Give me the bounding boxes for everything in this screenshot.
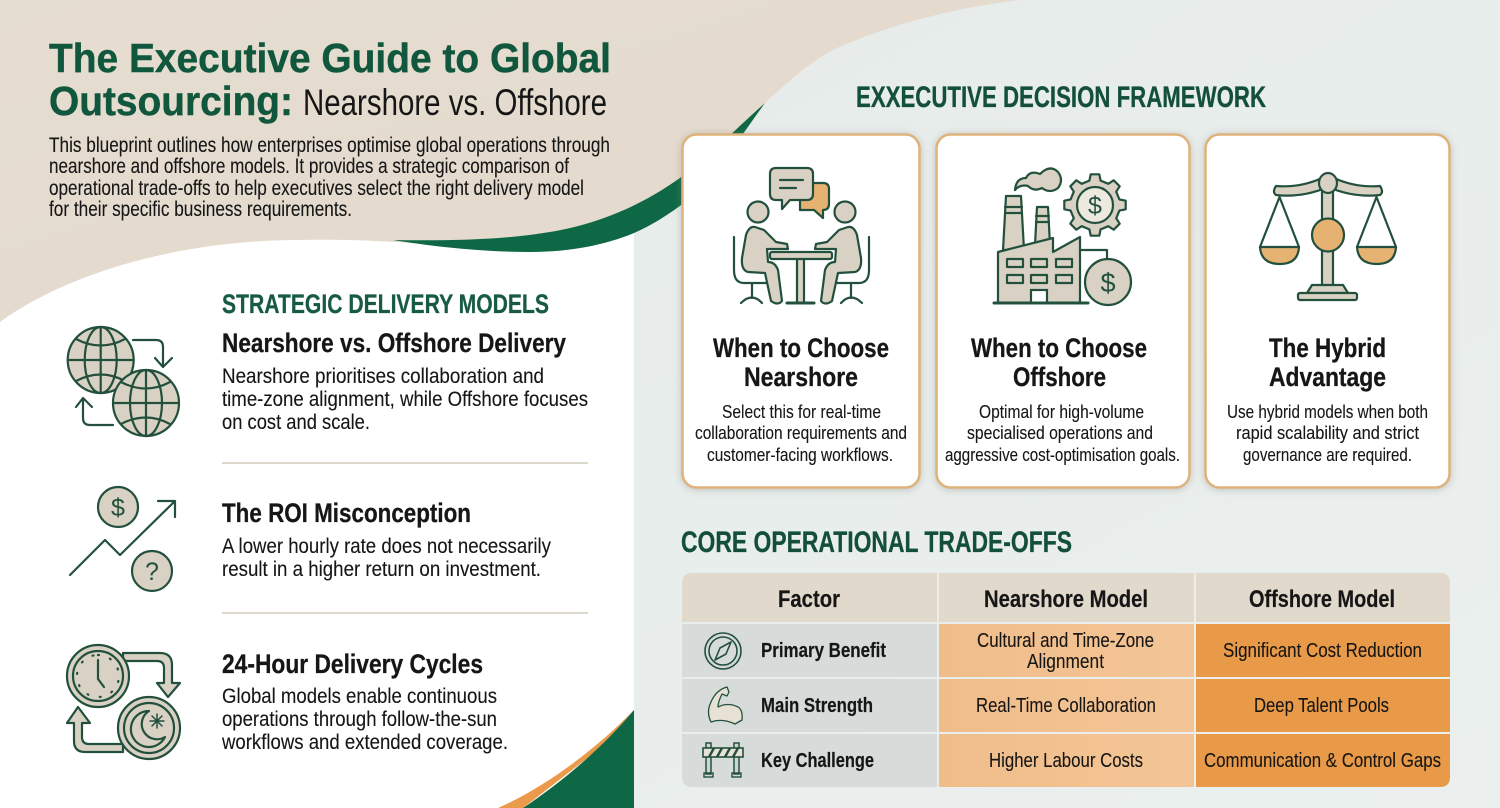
card text: Optimal for high-volume <box>979 401 1144 422</box>
title <box>49 35 611 124</box>
text: nearshore vs offshore delivery <box>222 328 588 434</box>
text: ROI misconception: The ROI Misconception <box>222 498 471 528</box>
card text: When to Choose <box>713 333 889 363</box>
card text: customer-facing workflows. <box>707 444 893 465</box>
icon: flexed arm <box>708 687 742 724</box>
card text <box>695 333 907 465</box>
icon: factory, gear and coins: $ <box>1100 268 1116 298</box>
text: ROI misconception: result in a higher return on investment. <box>222 558 541 581</box>
card text: specialised operations and <box>967 422 1153 443</box>
card text: Advantage <box>1269 362 1386 392</box>
card text: When to Choose <box>971 333 1147 363</box>
text: nearshore vs offshore delivery: time-zone alignment, while Offshore focuses <box>222 388 588 411</box>
icon: factory, gear and coins: $ <box>1088 192 1102 220</box>
intro text: for their specific business requirements. <box>49 198 352 221</box>
table header row: Offshore Model <box>1249 586 1395 613</box>
card text: Select this for real-time <box>722 401 881 422</box>
table header row: Nearshore Model <box>984 586 1148 613</box>
card text: governance are required. <box>1243 444 1412 465</box>
icon: two people at table talking <box>734 168 869 304</box>
card: when to choose offshore <box>936 134 1190 488</box>
icon: ROI chart with dollar and question <box>70 487 175 591</box>
card text <box>1227 333 1428 465</box>
table row: main strength <box>682 679 1450 732</box>
intro text: nearshore and offshore models. It provides a strategic comparison of <box>49 155 569 178</box>
table row: primary benefit <box>682 624 1450 677</box>
table header row: Factor <box>778 586 840 613</box>
table header row <box>682 573 1450 622</box>
table row: main strength: Deep Talent Pools <box>1254 695 1389 717</box>
table row: key challenge: Higher Labour Costs <box>989 750 1143 772</box>
card: when to choose nearshore <box>682 134 920 488</box>
background: white left panel <box>0 233 634 808</box>
intro text: operational trade-offs to help executives select the right delivery model <box>49 177 584 200</box>
text: 24-hour delivery cycles: operations through follow-the-sun <box>222 708 497 731</box>
text: 24-hour delivery cycles <box>221 649 508 754</box>
card text: aggressive cost-optimisation goals. <box>945 444 1180 465</box>
icon: compass <box>705 633 741 669</box>
table row: key challenge: Key Challenge <box>761 750 874 772</box>
table row: primary benefit: Primary Benefit <box>761 640 886 662</box>
icon: ROI chart with dollar and question: $ <box>111 494 125 522</box>
title: Outsourcing: <box>49 78 293 124</box>
background: beige header wave <box>0 0 1020 330</box>
card text: collaboration requirements and <box>695 422 907 443</box>
table row: primary benefit: Alignment <box>1027 651 1104 673</box>
table row: primary benefit: Significant Cost Reduction <box>1223 640 1422 662</box>
title: Nearshore vs. Offshore <box>303 82 607 123</box>
text: 24-hour delivery cycles: workflows and extended coverage. <box>221 731 508 754</box>
card: the hybrid advantage <box>1206 134 1450 488</box>
card text: Use hybrid models when both <box>1227 401 1428 422</box>
heading: executive decision framework: EXXECUTIVE DECISION FRAMEWORK <box>856 81 1266 114</box>
title: The Executive Guide to Global <box>49 35 611 81</box>
table row: primary benefit: Cultural and Time-Zone <box>977 630 1154 652</box>
icon: factory, gear and coins <box>994 168 1131 305</box>
text: nearshore vs offshore delivery: Nearshore prioritises collaboration and <box>222 365 544 388</box>
card text: Offshore <box>1013 362 1106 392</box>
table row: main strength: Main Strength <box>761 695 873 717</box>
card text: The Hybrid <box>1269 333 1386 363</box>
text: ROI misconception <box>222 498 551 581</box>
icon: 24-hour clock and moon cycle <box>67 645 180 759</box>
intro text <box>49 134 610 221</box>
text: 24-hour delivery cycles: Global models enable continuous <box>222 685 497 708</box>
text: ROI misconception: A lower hourly rate does not necessarily <box>222 535 551 558</box>
text: nearshore vs offshore delivery: Nearshore vs. Offshore Delivery <box>222 328 566 358</box>
table row: main strength: Real-Time Collaboration <box>976 695 1156 717</box>
icon: road barrier <box>703 743 743 777</box>
card text <box>945 333 1180 465</box>
heading: core operational trade-offs: CORE OPERATIONAL TRADE-OFFS <box>681 526 1072 559</box>
card text: rapid scalability and strict <box>1236 422 1419 443</box>
green swoosh <box>393 103 765 252</box>
orange corner accent <box>498 710 634 808</box>
intro text: This blueprint outlines how enterprises optimise global operations through <box>49 134 610 157</box>
icon: ROI chart with dollar and question: ? <box>145 558 159 586</box>
text: nearshore vs offshore delivery: on cost and scale. <box>222 411 370 434</box>
green corner <box>523 710 634 808</box>
text: 24-hour delivery cycles: 24-Hour Delivery Cycles <box>222 649 483 679</box>
card text: Nearshore <box>744 362 858 392</box>
icon: globes with exchange arrows <box>68 327 179 436</box>
table: core trade-offs <box>682 573 1450 787</box>
table row: key challenge: Communication & Control Gaps <box>1204 750 1441 772</box>
heading: strategic delivery models: STRATEGIC DELIVERY MODELS <box>222 289 549 319</box>
icon: balance scales <box>1260 173 1396 300</box>
table row: key challenge <box>682 734 1450 787</box>
